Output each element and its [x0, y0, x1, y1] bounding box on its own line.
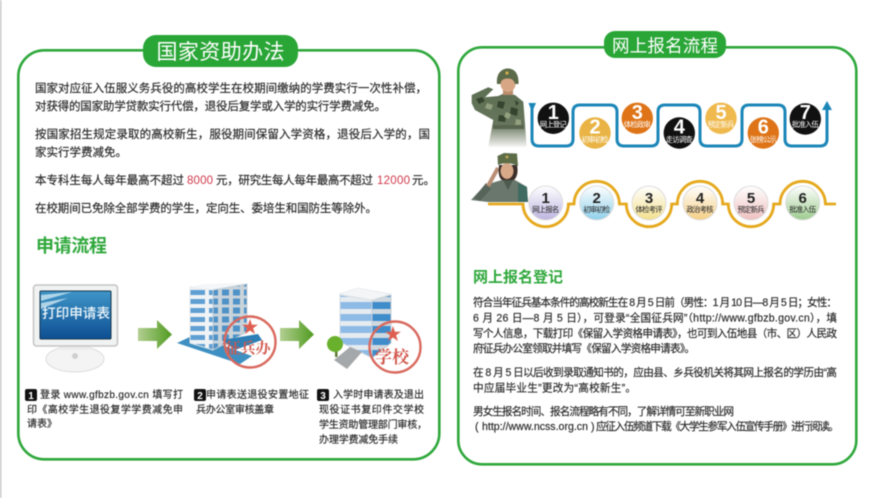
illustration: saluting soldier in helmet [472, 68, 527, 147]
text block: policy paragraphs: 本专科生每人每年最高不超过 [35, 173, 184, 187]
text block: registration details: 写个人信息，下载打印《保留入学资格申请表》，也可到入伍地县（市、区）人民政 [473, 327, 837, 340]
step 6: 张榜公示 [750, 135, 777, 144]
caption: step 2: 申请表送退役安置地征 [206, 388, 309, 401]
step 3: 体检考评 [636, 205, 663, 214]
step 3 [622, 102, 653, 134]
stamp: 征兵办 [224, 316, 276, 368]
caption: step 2: 兵办公室审核盖章 [196, 403, 274, 416]
step 5: 5 [747, 190, 755, 207]
illustration: saluting female soldier [471, 153, 528, 202]
text block: policy paragraphs: 8000 [187, 175, 213, 187]
text block: registration details: 6 月 26 日—8 月 5 日），可登录“全国征兵网”（http://www.gfbzb.gov.cn），填 [473, 312, 837, 324]
caption: step 1: 1 [28, 391, 34, 402]
step 4: 走访调查 [666, 135, 693, 144]
stamp: 学校: ★ [384, 325, 402, 344]
text block: policy paragraphs: 家实行学费减免。 [35, 145, 127, 159]
step 2 [580, 186, 614, 220]
step 3 [632, 186, 666, 220]
text block: policy paragraphs: 按国家招生规定录取的高校新生，服役期间保留入学资格，退役后入学的，国 [35, 127, 430, 141]
step 6: 6 [758, 116, 769, 138]
caption: step 1: 印《高校学生退役复学学费减免申 [27, 403, 183, 416]
step 3: 3 [632, 102, 643, 124]
step 1: 1 [542, 190, 550, 207]
heading pill: 国家资助办法: 国家资助办法 [156, 41, 284, 64]
caption: step 1 [25, 388, 183, 430]
step 2: 2 [593, 190, 601, 207]
step 1 [538, 102, 569, 134]
step 2: 初审初检 [583, 205, 611, 214]
heading pill: 网上报名流程: 网上报名流程 [612, 36, 718, 56]
text block: registration details [473, 296, 839, 433]
text block: policy paragraphs [35, 81, 435, 215]
text block: policy paragraphs: 对获得的国家助学贷款实行代偿，退役后复学或入学的实行学费减免。 [35, 99, 386, 113]
icon: computer monitor: 打印申请表 [42, 305, 110, 321]
caption: step 3: 办理学费减免手续 [319, 433, 398, 446]
step 7 [790, 102, 821, 135]
stamp: 征兵办: ★ [242, 318, 258, 337]
text block: registration details: 符合当年征兵基本条件的高校新生在 8 月 5 日前（男性：1 月 10 日—8 月 5 日；女性： [473, 296, 837, 309]
step 5: 预定新兵 [708, 120, 735, 129]
text block: registration details: 中应届毕业生”更改为“高校新生”。 [473, 382, 636, 394]
caption: step 3: 3 [320, 391, 326, 402]
step 4: 政治考核 [686, 205, 714, 214]
step 5 [734, 186, 768, 220]
chart: seven-step serpentine flow [528, 101, 832, 149]
step 5 [705, 102, 737, 134]
step 6: 6 [799, 190, 807, 207]
heading: 网上报名登记: 网上报名登记 [473, 268, 563, 286]
caption: step 2 [194, 388, 309, 416]
text block: policy paragraphs: 在校期间已免除全部学费的学生，定向生、委培生和国防生等除外。 [35, 201, 377, 215]
step 7: 批准入伍 [792, 120, 819, 129]
step 4 [664, 116, 695, 149]
step 2 [579, 116, 611, 149]
caption: step 3 [317, 388, 427, 446]
caption: step 1: 登录 www.gfbzb.gov.cn 填写打 [40, 388, 183, 401]
step 1: 网上登记 [540, 120, 567, 129]
page edge [0, 0, 2, 498]
step 4 [683, 186, 717, 220]
arrow: step 2 to step 3 [280, 320, 314, 349]
chart: six-step wave flow [488, 181, 836, 227]
caption: step 3: 现役证书复印件交学校 [319, 403, 424, 416]
stamp: 征兵办: 征兵办 [226, 339, 272, 357]
text block: registration details: 男女生报名时间、报名流程略有不同，了解详情可至新职业网 [473, 405, 734, 418]
caption: step 3: 入学时申请表及退出 [333, 388, 424, 401]
marker: flow start [528, 103, 536, 112]
text block: registration details: ( [475, 421, 479, 433]
step 1: 网上报名 [532, 205, 559, 214]
text block: registration details: 在 8 月 5 日以后收到录取通知书的，应由县、乡兵役机关将其网上报名的学历由“高 [473, 366, 837, 379]
step 6: 批准入伍 [789, 205, 817, 214]
text block: registration details: 应征入伍频道下载《大学生参军入伍宣传手册》进行阅读。 [596, 420, 839, 433]
text block: policy paragraphs: 12000 [377, 175, 410, 187]
caption: step 3: 学生资助管理部门审核， [319, 418, 427, 431]
text block: policy paragraphs: 元，研究生每人每年最高不超过 [216, 173, 374, 187]
icon: office building with stamp [177, 283, 276, 368]
panel: 国家资助办法 [18, 35, 439, 459]
text block: registration details: ) [591, 421, 595, 433]
text block: policy paragraphs: 国家对应征入伍服义务兵役的高校学生在校期间缴纳的学费实行一次性补偿， [35, 81, 427, 95]
step 2: 2 [589, 116, 601, 138]
text block: registration details: http://www.ncss.org.cn [482, 421, 588, 433]
icon: computer monitor [34, 285, 118, 372]
panel: 网上报名流程 [458, 31, 856, 464]
step 5: 预定新兵 [738, 205, 765, 214]
heading pill: 国家资助办法 [143, 35, 298, 67]
arrow: step 1 to step 2 [138, 320, 172, 349]
step 1: 1 [548, 102, 559, 124]
text block: policy paragraphs: 元。 [412, 175, 435, 187]
step 5: 5 [715, 102, 727, 124]
icon: school building with stamp [327, 288, 420, 372]
step 2: 初审初检 [582, 135, 609, 144]
heading pill: 网上报名流程 [604, 31, 726, 58]
step 4: 4 [696, 190, 705, 207]
caption: step 1: 请表》 [27, 417, 57, 430]
step 1 [529, 186, 563, 220]
caption: step 2: 2 [197, 391, 203, 402]
step 3: 体检政审 [624, 120, 651, 129]
step 4: 4 [674, 116, 686, 138]
text block: registration details: 府征兵办公室领取并填写《保留入学资格申请表》。 [473, 342, 695, 355]
arrow: flow end [822, 101, 832, 110]
step 6 [786, 186, 820, 220]
step 6 [748, 116, 779, 149]
stamp: 学校 [370, 322, 420, 372]
step 3: 3 [645, 190, 653, 207]
stamp: 学校: 学校 [375, 347, 411, 367]
step 7: 7 [800, 102, 811, 124]
heading: 申请流程: 申请流程 [36, 236, 107, 256]
